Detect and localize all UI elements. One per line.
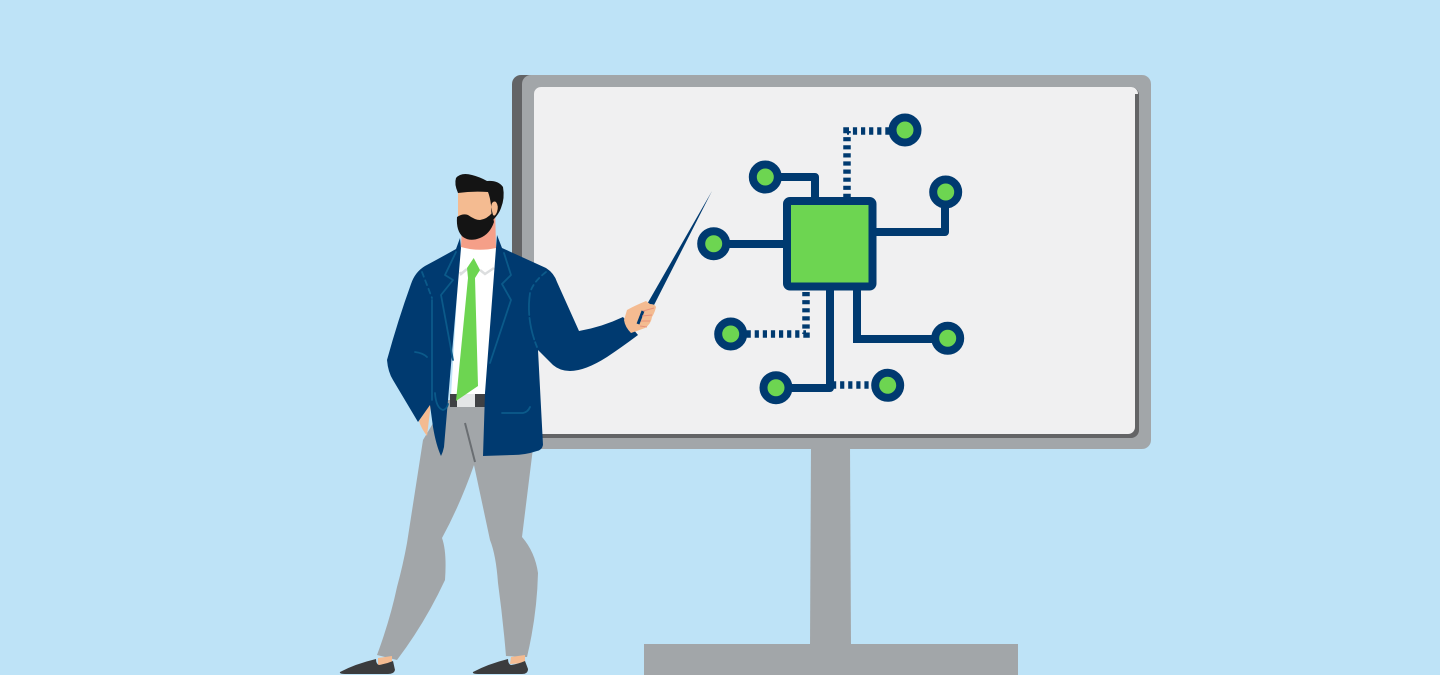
dotted connectors — [744, 131, 892, 385]
face — [458, 188, 496, 232]
presenter figure — [340, 174, 712, 674]
belt — [450, 394, 485, 407]
collar shadow — [460, 268, 494, 274]
chip network diagram — [701, 118, 960, 400]
shirt — [451, 246, 497, 396]
hair and beard — [455, 174, 504, 240]
shoes — [340, 655, 528, 674]
central chip — [787, 201, 872, 286]
tie — [456, 258, 480, 401]
jacket seams and lapels — [415, 252, 546, 413]
neck — [461, 205, 496, 250]
jacket — [387, 235, 638, 456]
trousers — [377, 400, 538, 660]
hand in pocket — [419, 403, 431, 436]
chip nodes — [701, 118, 960, 400]
pointer stick — [646, 191, 712, 309]
pointing hand — [624, 301, 656, 333]
board stand — [644, 445, 1018, 675]
solid connectors — [714, 177, 948, 388]
whiteboard — [512, 75, 1151, 449]
